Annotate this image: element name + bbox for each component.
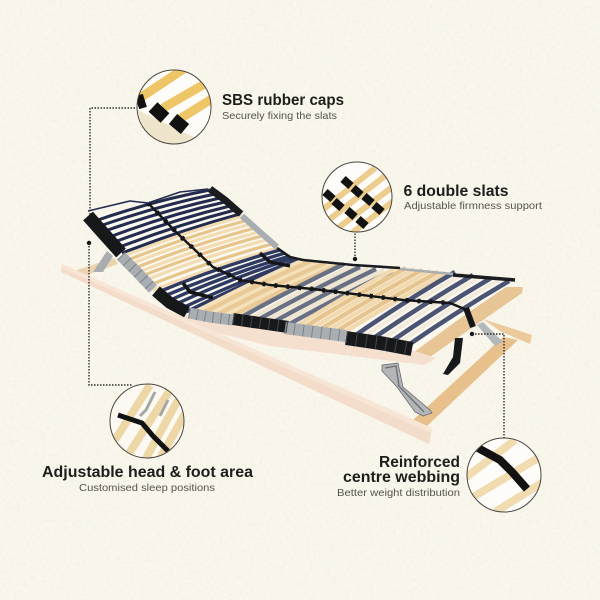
inset photo: head adjustment xyxy=(110,384,186,462)
front side rail xyxy=(61,264,432,444)
head section wood slats xyxy=(124,216,277,290)
heading: Adjustable head & foot area xyxy=(42,464,253,481)
subheading: Securely fixing the slats xyxy=(222,110,337,122)
foot section pale slats G xyxy=(359,273,500,346)
side caps along back edge xyxy=(210,189,515,280)
foot section navy slats G xyxy=(350,272,509,348)
head lift bracket xyxy=(93,251,113,272)
callout: reinforced centre webbing xyxy=(337,438,550,512)
knee section navy slats xyxy=(156,250,303,312)
dotted leader: double slats xyxy=(353,232,357,261)
dotted leader: adjustable head and foot xyxy=(87,241,133,385)
callout: adjustable head and foot area xyxy=(42,384,253,494)
inset photo: rubber caps xyxy=(136,70,212,144)
heading: Reinforced xyxy=(379,454,460,471)
heading line 2: centre webbing xyxy=(343,469,460,486)
subheading: Better weight distribution xyxy=(337,487,460,499)
callout: SBS rubber caps xyxy=(136,70,344,144)
inset photo: webbing xyxy=(466,438,542,512)
heading: 6 double slats xyxy=(404,183,508,200)
head section navy slats xyxy=(92,190,240,253)
foot lift bracket xyxy=(382,363,432,416)
centre webbing straps xyxy=(88,189,473,327)
slatted bed frame illustration xyxy=(61,189,532,444)
callout: 6 double slats xyxy=(320,162,542,236)
foot lift arm xyxy=(477,322,503,346)
flat section wood slats D xyxy=(192,260,339,319)
flat section wood between grey slats xyxy=(244,266,384,326)
flat section wood slats F xyxy=(292,267,446,335)
hanging black strap xyxy=(443,338,463,375)
white base under slats xyxy=(88,189,515,350)
dotted leader: centre webbing xyxy=(470,332,504,438)
subheading: Customised sleep positions xyxy=(79,482,215,494)
dotted leader: SBS rubber caps xyxy=(90,108,138,216)
under-slat side rail xyxy=(150,296,436,365)
back frame and cross bars xyxy=(77,258,532,426)
flat section grey-blue slats E xyxy=(236,264,392,327)
side caps along front edge xyxy=(88,216,412,349)
heading: SBS rubber caps xyxy=(222,92,344,109)
subheading: Adjustable firmness support xyxy=(404,200,542,212)
inset photo: double slats xyxy=(322,162,392,232)
